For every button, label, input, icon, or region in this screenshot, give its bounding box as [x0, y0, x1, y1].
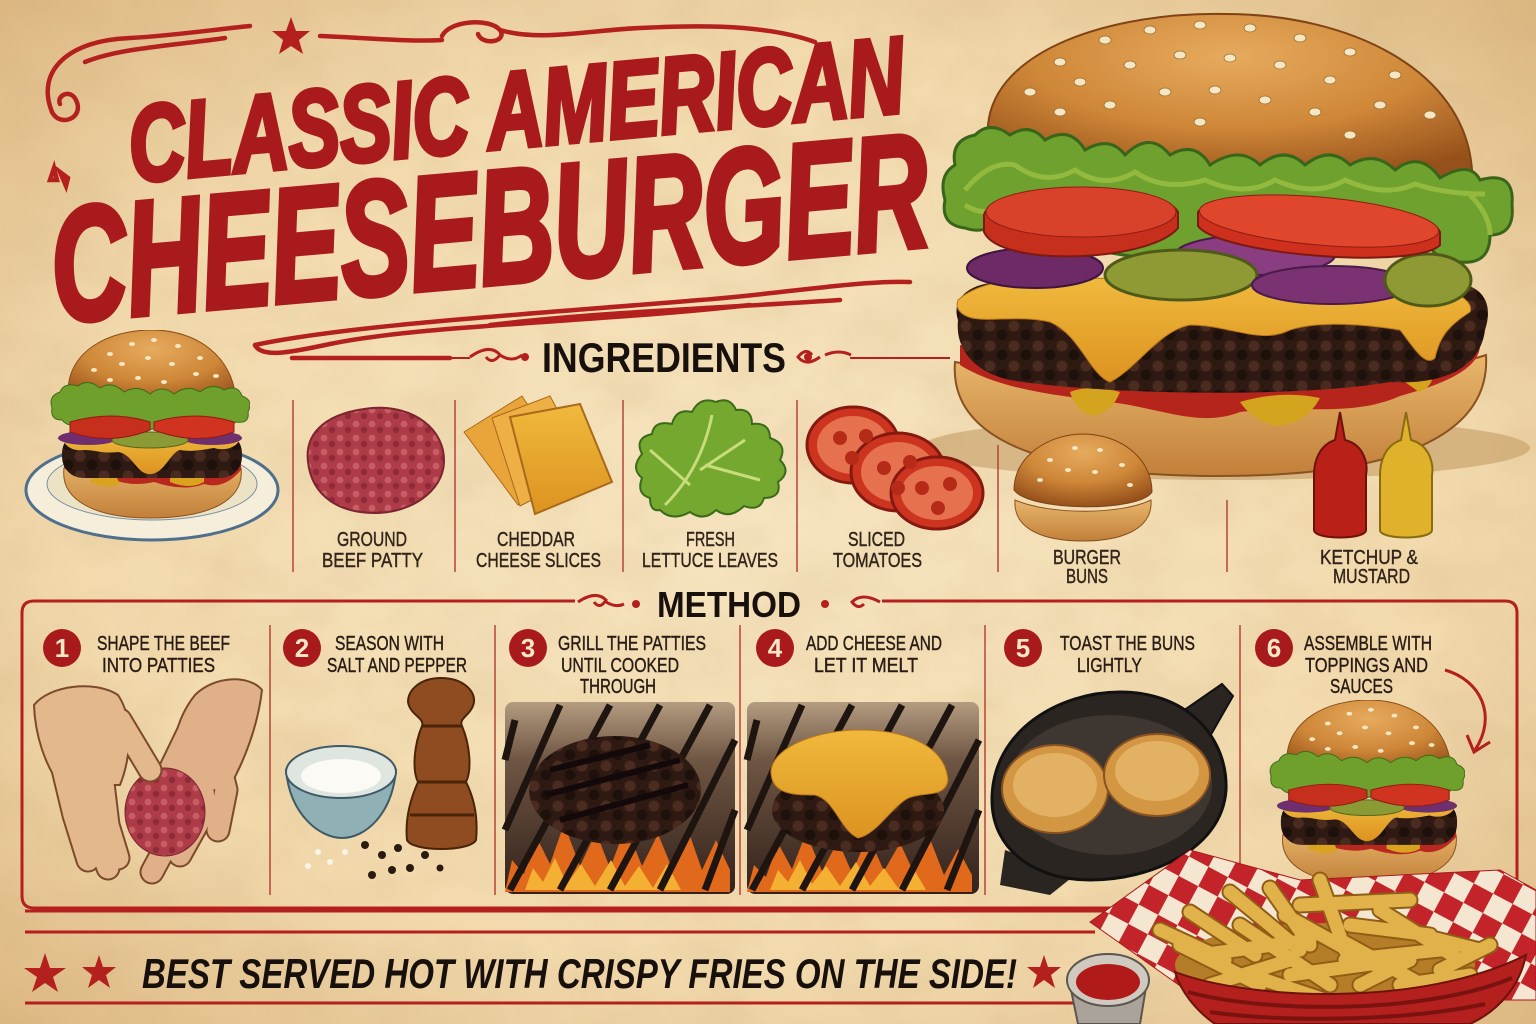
star ornament — [272, 17, 310, 54]
skillet with buns — [992, 684, 1233, 895]
tagline: BEST SERVED HOT WITH CRISPY FRIES ON THE SIDE! — [142, 950, 1017, 997]
label: burger buns: BURGER — [1053, 547, 1121, 569]
bottom bun — [955, 355, 1486, 476]
stars — [24, 953, 1061, 992]
label: ground beef patty — [322, 529, 423, 572]
step number 1 — [43, 629, 81, 667]
label: ground beef patty: BEEF PATTY — [322, 550, 423, 572]
ingredient: beef patty — [308, 408, 444, 572]
closing tagline band — [24, 911, 1130, 1003]
step number 4 — [756, 629, 794, 667]
step number 5: 5 — [1016, 633, 1030, 663]
fries shadow backing — [1175, 923, 1475, 1007]
label: sliced tomatoes: SLICED — [848, 529, 905, 551]
step 5 — [992, 629, 1233, 895]
ingredients heading — [305, 334, 950, 381]
salt bowl — [286, 746, 396, 838]
ingredient: lettuce — [636, 400, 786, 572]
step 2 text: SEASON WITH — [335, 633, 444, 655]
top sesame bun — [988, 14, 1472, 186]
peppercorns and salt — [305, 841, 444, 879]
title line 2: CHEESEBURGER — [43, 100, 936, 357]
step 4 text: ADD CHEESE AND — [806, 633, 942, 655]
label: sliced tomatoes — [833, 529, 922, 572]
step 3 text: UNTIL COOKED — [561, 655, 679, 677]
hands shaping patty — [34, 679, 262, 872]
step 3 text: GRILL THE PATTIES — [558, 633, 706, 655]
step 6 text: SAUCES — [1330, 676, 1393, 698]
step number 5 — [1004, 629, 1042, 667]
step 3 text — [558, 633, 706, 698]
step dividers — [270, 625, 1240, 895]
hero cheeseburger illustration — [920, 14, 1530, 480]
grill with patty — [505, 702, 735, 894]
ingredient: cheddar slices — [464, 396, 612, 572]
lettuce — [943, 128, 1512, 262]
label: fresh lettuce leaves — [642, 529, 778, 572]
step 2 — [283, 629, 477, 879]
step 1 — [34, 629, 262, 872]
step 6 text: TOPPINGS AND — [1305, 655, 1428, 677]
step 6 text — [1304, 633, 1432, 698]
ketchup cup — [1067, 954, 1149, 1024]
title — [43, 14, 936, 358]
plated burger illustration — [26, 330, 278, 540]
red basket — [1175, 955, 1526, 1024]
label: fresh lettuce leaves: FRESH — [686, 529, 735, 551]
small burger — [51, 330, 250, 518]
step 1 text: INTO PATTIES — [102, 655, 215, 677]
step 3 text: THROUGH — [580, 676, 656, 698]
step number 6: 6 — [1267, 633, 1281, 663]
ingredient: ketchup and mustard — [1314, 412, 1432, 588]
step number 1: 1 — [55, 633, 69, 663]
ingredient dividers — [293, 400, 1227, 572]
label: cheddar cheese slices: CHEESE SLICES — [476, 550, 601, 572]
step 5 text: LIGHTLY — [1077, 655, 1142, 677]
pepper mill — [407, 678, 477, 849]
step 2 text — [327, 633, 467, 677]
sesame seeds — [1024, 21, 1436, 139]
label: cheddar cheese slices: CHEDDAR — [497, 529, 575, 551]
step number 3: 3 — [521, 633, 535, 663]
ingredient: sliced tomatoes — [807, 407, 983, 572]
label: burger buns: BUNS — [1066, 566, 1108, 588]
step 5 text — [1060, 633, 1195, 677]
fries basket — [1090, 850, 1536, 1024]
ketchup and mustard layer — [960, 345, 1480, 418]
method heading — [578, 584, 880, 625]
fries — [1160, 880, 1490, 1005]
label: ketchup and mustard: KETCHUP & — [1320, 547, 1419, 569]
step number 4: 4 — [768, 633, 783, 663]
label: burger buns — [1053, 547, 1121, 588]
step 4 text: LET IT MELT — [814, 655, 918, 677]
checkered paper — [1090, 850, 1536, 1000]
melted cheese — [957, 278, 1471, 382]
plate — [26, 440, 278, 540]
beef patty — [957, 282, 1488, 393]
step 4 text — [806, 633, 942, 677]
method panel frame — [22, 601, 1517, 908]
label: ground beef patty: GROUND — [337, 529, 407, 551]
label: fresh lettuce leaves: LETTUCE LEAVES — [642, 550, 778, 572]
step 4 — [747, 629, 979, 894]
step 5 text: TOAST THE BUNS — [1060, 633, 1195, 655]
assembled burger — [1270, 700, 1465, 884]
step number 2: 2 — [295, 633, 309, 663]
step number 2 — [283, 629, 321, 667]
label: ketchup and mustard — [1320, 547, 1419, 588]
title ornaments — [48, 22, 910, 358]
step 3 — [505, 629, 735, 894]
label: ketchup and mustard: MUSTARD — [1333, 566, 1410, 588]
step 6 text: ASSEMBLE WITH — [1304, 633, 1432, 655]
ingredients heading: INGREDIENTS — [542, 334, 786, 381]
step 6 — [1255, 629, 1490, 884]
method heading: METHOD — [657, 584, 801, 625]
step number 3 — [509, 629, 547, 667]
flames — [505, 824, 730, 892]
step 1 text — [97, 633, 230, 677]
step 1 text: SHAPE THE BEEF — [97, 633, 230, 655]
arrow — [1445, 670, 1490, 752]
label: sliced tomatoes: TOMATOES — [833, 550, 922, 572]
label: cheddar cheese slices — [476, 529, 601, 572]
grill with cheese-topped patty — [747, 702, 979, 894]
red onion rings — [967, 248, 1103, 288]
tomato slices — [984, 190, 1178, 256]
pickle slices — [1105, 250, 1257, 300]
step 2 text: SALT AND PEPPER — [327, 655, 467, 677]
ingredient: burger buns — [1014, 434, 1152, 588]
step number 6 — [1255, 629, 1293, 667]
